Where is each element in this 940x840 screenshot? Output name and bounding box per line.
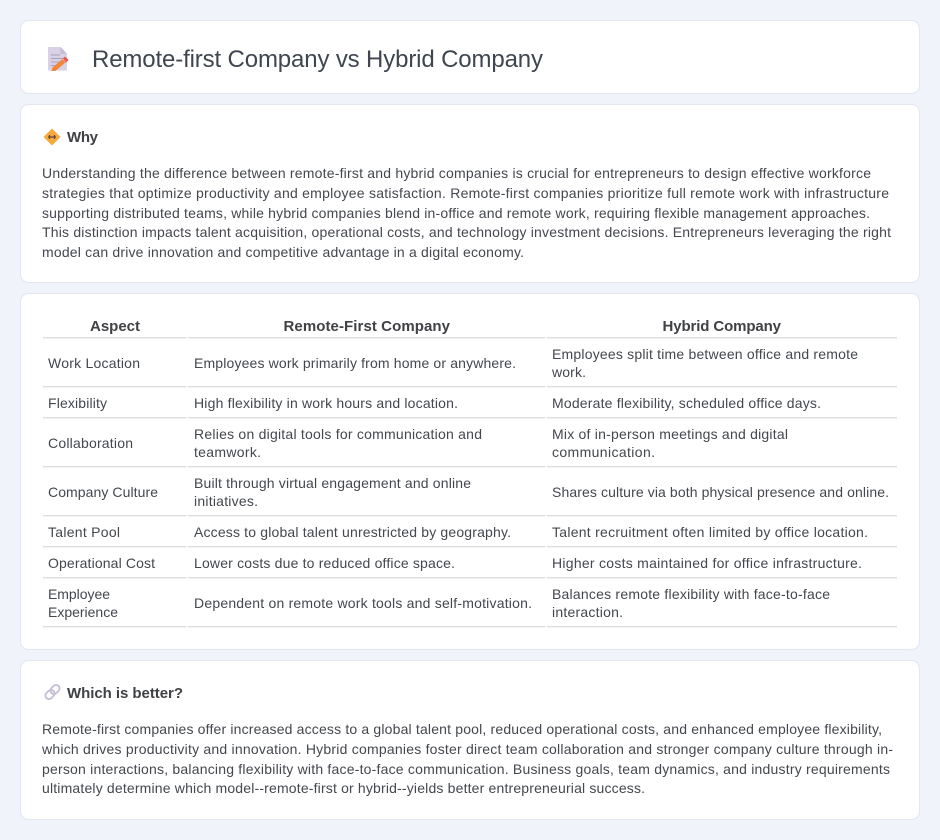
row: company culture — [43, 475, 897, 516]
panel: why — [20, 104, 920, 282]
row: talent pool: Access to global talent unrestricted by geography. — [194, 524, 511, 540]
row: employee experience: Experience — [48, 604, 118, 620]
heading: which is better: Which is better? — [67, 685, 183, 702]
text block: which is better paragraph: which drives productivity and innovation. Hybrid companies foster direct team collaboration and stronger company culture through in- — [41, 741, 893, 757]
row: flexibility: Flexibility — [48, 395, 107, 411]
row: employee experience — [43, 586, 897, 627]
icon: document with pencil — [48, 47, 68, 71]
table header row: Aspect — [90, 318, 140, 335]
row: work location: work. — [551, 364, 586, 380]
text block: why paragraph: supporting distributed teams, while hybrid companies blend in-office and remote work, requiring flexible management approaches. — [42, 205, 870, 221]
row: flexibility — [43, 395, 897, 418]
row: talent pool: Talent recruitment often limited by office location. — [552, 524, 868, 540]
row: collaboration: teamwork. — [194, 444, 261, 460]
row: flexibility: High flexibility in work hours and location. — [194, 395, 458, 411]
row: flexibility: Moderate flexibility, scheduled office days. — [552, 395, 821, 411]
row: collaboration: Relies on digital tools for communication and — [194, 426, 482, 442]
row: collaboration: Collaboration — [48, 435, 133, 451]
row: company culture: Shares culture via both physical presence and online. — [552, 484, 889, 500]
table header row — [43, 318, 897, 338]
text block: why paragraph: strategies that optimize productivity and employee satisfaction. Remote-first companies prioritize full remote work with infrastructure — [42, 185, 889, 201]
row: employee experience: Employee — [48, 586, 110, 602]
table header row: Hybrid Company — [662, 318, 782, 335]
text block: why paragraph: This distinction impacts talent acquisition, operational costs, and technology investment decisions. Entrepreneurs leveraging the right — [42, 224, 891, 240]
row: operational cost: Operational Cost — [48, 555, 155, 571]
panel: header — [20, 20, 920, 94]
icon: chain link — [44, 683, 61, 701]
text block: which is better paragraph: Remote-first companies offer increased access to a global talent pool, reduced operational costs, and enhanced employee flexibility, — [42, 721, 882, 737]
row: company culture: initiatives. — [194, 493, 258, 509]
text block: why paragraph — [42, 165, 891, 260]
row: work location: Employees split time between office and remote — [552, 346, 858, 362]
title: Remote-first Company vs Hybrid Company — [92, 46, 543, 73]
row: talent pool: Talent Pool — [48, 524, 120, 540]
text block: why paragraph: model can drive innovation and competitive advantage in a digital economy. — [42, 244, 524, 260]
row: company culture: Company Culture — [48, 484, 158, 500]
row: collaboration: communication. — [552, 444, 655, 460]
text block: which is better paragraph: person interactions, balancing flexibility with face-to-face communication. Business goals, team dynamics, and industry requirements — [42, 761, 890, 777]
row: company culture: Built through virtual engagement and online — [194, 475, 471, 491]
row: operational cost — [43, 555, 897, 578]
panel: which is better — [20, 660, 920, 820]
icon: diamond sign — [44, 128, 60, 146]
row: talent pool — [43, 524, 897, 547]
table header row: Remote-First Company — [284, 318, 451, 335]
panel: comparison table — [20, 294, 920, 650]
row: operational cost: Lower costs due to reduced office space. — [194, 555, 455, 571]
row: collaboration — [43, 426, 897, 467]
heading: why: Why — [67, 129, 99, 146]
row: work location: Employees work primarily from home or anywhere. — [194, 355, 516, 371]
row: work location: Work Location — [48, 355, 140, 371]
row: collaboration: Mix of in-person meetings and digital — [552, 426, 788, 442]
row: employee experience: Dependent on remote work tools and self-motivation. — [194, 595, 532, 611]
row: employee experience: interaction. — [552, 604, 623, 620]
row: employee experience: Balances remote flexibility with face-to-face — [552, 586, 830, 602]
row: work location — [43, 346, 897, 387]
text block: which is better paragraph: ultimately determine which model--remote-first or hybrid--yields better entrepreneurial success. — [42, 780, 645, 796]
text block: which is better paragraph — [41, 721, 893, 796]
row: operational cost: Higher costs maintained for office infrastructure. — [552, 555, 862, 571]
text block: why paragraph: Understanding the difference between remote-first and hybrid companies is crucial for entrepreneurs to design effective workforce — [42, 165, 871, 181]
